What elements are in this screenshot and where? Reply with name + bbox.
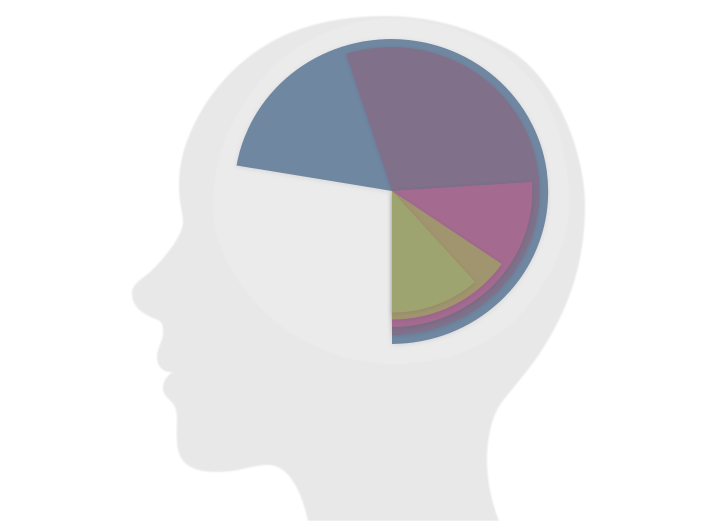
wedge: pink	[392, 182, 532, 327]
brain area	[213, 18, 569, 364]
head silhouette	[132, 16, 585, 521]
wedge: purple	[346, 47, 540, 335]
wedge: tan	[392, 191, 502, 320]
wedge: blue	[236, 39, 548, 344]
pie chart	[236, 39, 548, 344]
wedge: green	[392, 191, 475, 313]
